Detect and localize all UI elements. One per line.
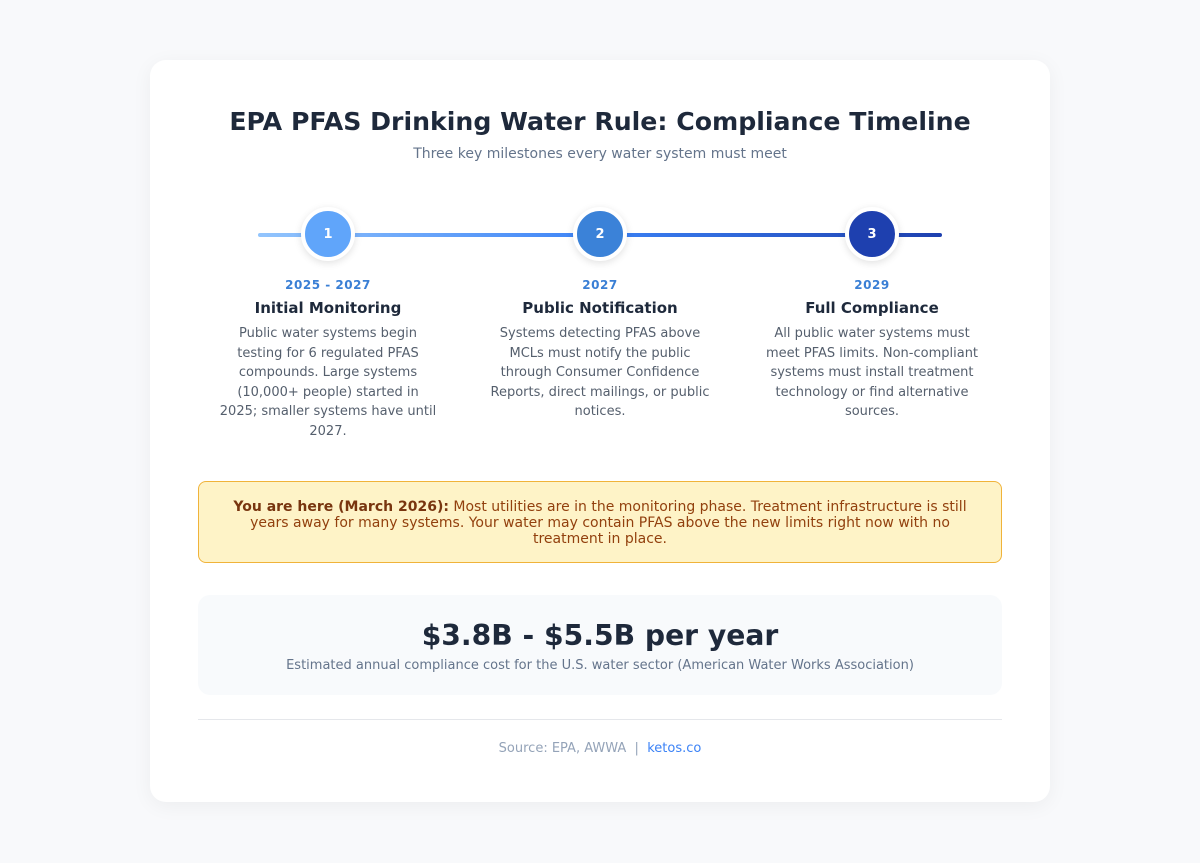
milestone 1 text: Public water systems begin testing for 6 regulated PFAS compounds. Large systems (10,000+ people) started in 2025; smaller systems have until 2027. [220,326,436,438]
milestone 2 circle [573,207,627,261]
milestone 2 text: 2027 [582,278,618,292]
cost box: $3.8B - $5.5B per year [422,619,778,652]
milestone 3 circle: 3 [867,226,877,242]
milestone 2 text [491,278,709,419]
title: EPA PFAS Drinking Water Rule: Compliance Timeline [229,107,971,136]
milestone 1 circle [301,207,355,261]
timeline [258,233,942,237]
card [150,60,1050,802]
milestone 2 text: Systems detecting PFAS above MCLs must notify the public through Consumer Confidence Reports, direct mailings, or public notices. [491,326,709,419]
source: Source: EPA, AWWA | ketos.co [499,741,701,756]
milestone 3 text: Full Compliance [805,299,939,317]
milestone 3 text: 2029 [854,278,890,292]
milestone 3 text [766,278,978,419]
subtitle: Three key milestones every water system must meet [413,146,787,162]
milestone 1 text: Initial Monitoring [255,299,401,317]
callout [198,481,1002,563]
callout: You are here (March 2026): Most utilities are in the monitoring phase. Treatment infrastructure is still years away for many systems. Your water may contain PFAS above the new limits right now with no treatment in place. [233,499,967,547]
milestone 3 circle [845,207,899,261]
milestone 1 text: 2025 - 2027 [285,278,371,292]
cost box: Estimated annual compliance cost for the U.S. water sector (American Water Works Association) [286,658,914,673]
milestone 1 circle: 1 [323,226,333,242]
milestone 2 text: Public Notification [522,299,678,317]
milestone 2 circle: 2 [595,226,605,242]
cost box [198,595,1002,695]
milestone 3 text: All public water systems must meet PFAS limits. Non-compliant systems must install treatment technology or find alternative sources. [766,326,978,419]
